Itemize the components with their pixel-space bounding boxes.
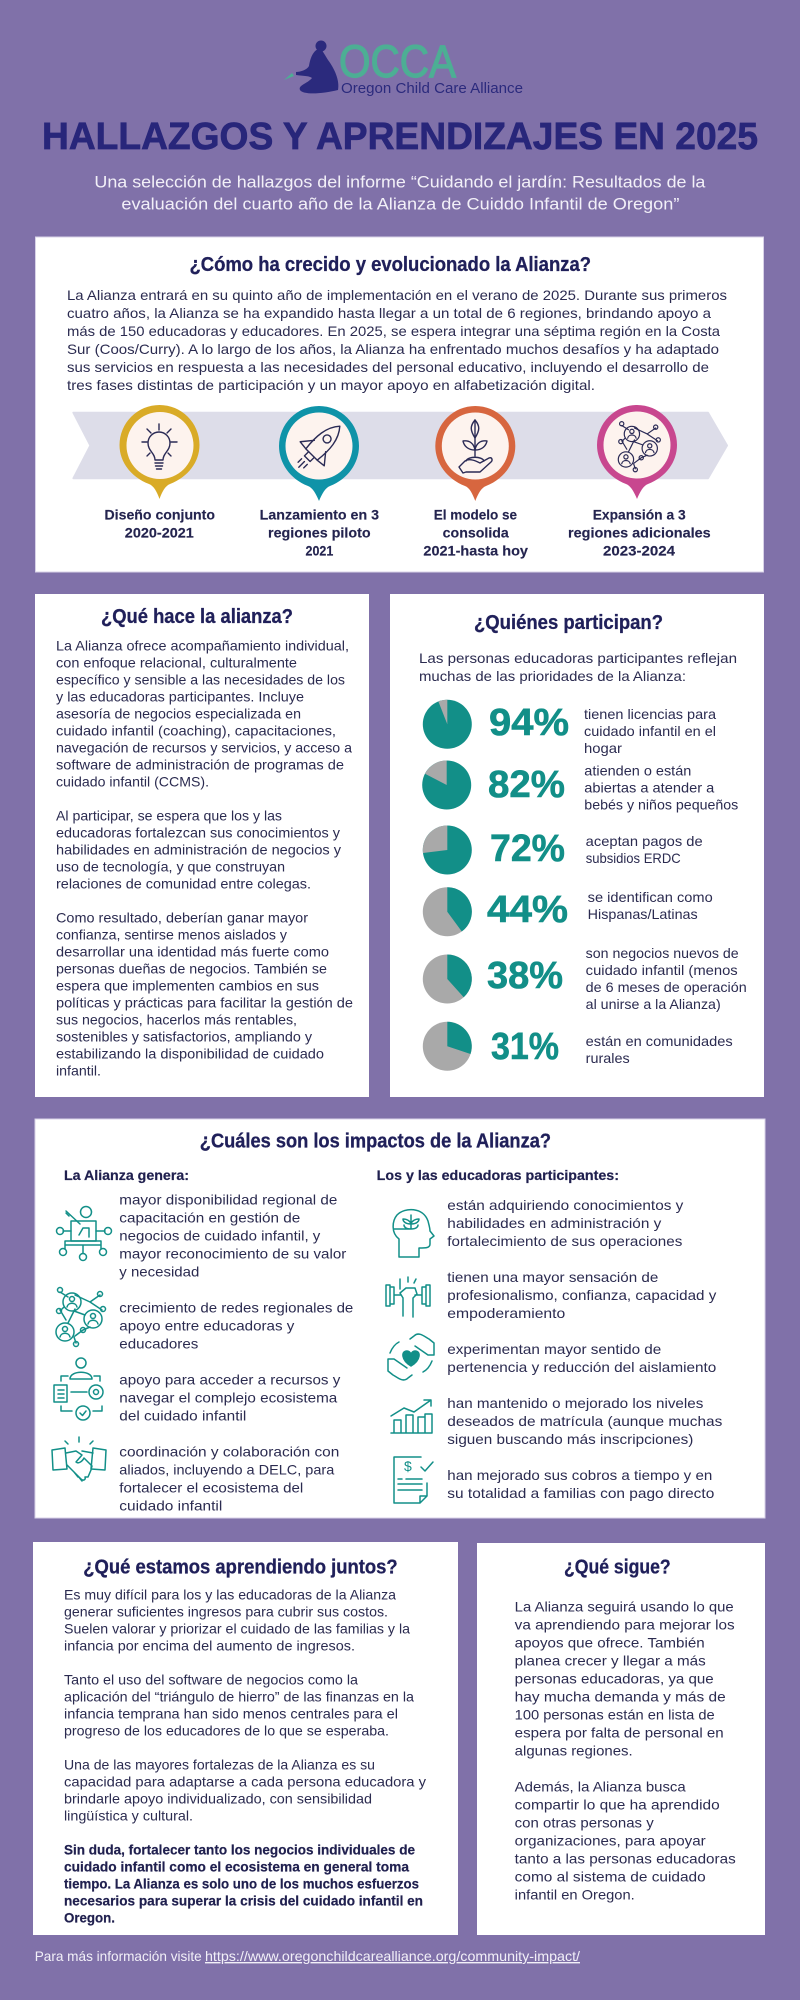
body text: what's next: planea crecer y llegar a más: [515, 1652, 706, 1668]
body text: what's next: apoyos que ofrece. También: [515, 1634, 705, 1650]
body text: learning: [64, 1586, 426, 1823]
heading: what's next: ¿Qué sigue?: [564, 1557, 671, 1579]
body text: growth: tres fases distintas de participación y un mayor apoyo en alfabetización digital.: [67, 377, 595, 393]
stat: 38% new businesses: cuidado infantil (menos: [586, 962, 738, 978]
subheading: the alliance generates: La Alianza genera:: [64, 1167, 189, 1183]
body text: what's next: [515, 1598, 736, 1902]
body text: what's next: como al sistema de cuidado: [515, 1868, 706, 1884]
icon: plant in hand: [459, 420, 492, 473]
text: acquiring knowledge: [447, 1197, 683, 1249]
text: enrollment: han mantenido o mejorado los niveles: [447, 1395, 703, 1411]
body text: what it does: cuidado infantil (CCMS).: [56, 774, 209, 790]
body text: what it does: sostenibles y satisfactorios, ampliando y: [56, 1029, 312, 1045]
stat: 94% licensed: hogar: [584, 740, 622, 756]
bold conclusion: learning: [64, 1841, 423, 1925]
body text: learning: lingüística y cultural.: [64, 1807, 193, 1823]
stat: 38% new businesses: 38%: [487, 955, 563, 997]
text: training availability: capacitación en gestión de: [119, 1209, 301, 1225]
icon: light bulb: [142, 424, 177, 469]
body text: what's next: espera por falta de personal en: [515, 1724, 724, 1740]
body text: what's next: hay mucha demanda y más de: [515, 1688, 726, 1704]
body text: what it does: Como resultado, deberían ganar mayor: [56, 910, 308, 926]
body text: what's next: algunas regiones.: [515, 1742, 633, 1758]
text: training availability: [119, 1191, 347, 1279]
body text: what it does: espera que implementen cambios en sus: [56, 978, 319, 994]
label: expansion: regiones adicionales: [568, 524, 711, 540]
text: professionalism: [447, 1269, 716, 1321]
label: pilot launch: regiones piloto: [268, 524, 371, 540]
body text: growth: más de 150 educadoras y educadores. En 2025, se espera integrar una séptima región en la Costa: [67, 323, 720, 339]
body text: what it does: La Alianza ofrece acompañamiento individual,: [56, 638, 349, 654]
body text: growth: [67, 287, 727, 393]
stat: 94% licensed: 94%: [489, 702, 569, 744]
pin: co-design: [120, 405, 200, 499]
stat: 82% infants: abiertas a atender a: [584, 780, 715, 796]
label: consolidated model: consolida: [443, 524, 509, 540]
icon: dumbbell and fist: [386, 1277, 430, 1317]
stat: 31% rural: rurales: [586, 1050, 630, 1066]
text: professionalism: tienen una mayor sensación de: [447, 1269, 659, 1285]
heading: who participates: ¿Quiénes participan?: [474, 612, 663, 634]
text: resource navigation: apoyo para acceder a recursos y: [119, 1371, 340, 1387]
body text: what it does: relaciones de comunidad entre colegas.: [56, 876, 311, 892]
stat: 38% new businesses: son negocios nuevos de: [586, 945, 739, 961]
subheading: participating educators: Los y las educadoras participantes:: [377, 1167, 619, 1183]
heading: impacts: ¿Cuáles son los impactos de la Alianza?: [200, 1131, 551, 1153]
panel: impacts: [35, 1119, 765, 1518]
stat: 82% infants: atienden o están: [584, 763, 691, 779]
subtitle: [94, 172, 706, 214]
stat: 94% licensed: [423, 700, 716, 756]
stat: 31% rural: [423, 1022, 733, 1071]
label: consolidated model: El modelo se: [434, 506, 517, 522]
text: enrollment: siguen buscando más inscripciones): [447, 1431, 693, 1447]
stat: 82% infants: [422, 760, 738, 813]
text: acquiring knowledge: fortalecimiento de sus operaciones: [447, 1233, 682, 1249]
body text: learning: capacidad para adaptarse a cada persona educadora y: [64, 1773, 426, 1789]
body text: growth: sus servicios en respuesta a las necesidades del personal educativo, incluyendo el desarrollo de: [67, 359, 709, 375]
stat: 31% rural: están en comunidades: [586, 1033, 733, 1049]
label: consolidated model: 2021-hasta hoy: [423, 542, 528, 558]
heading: growth: ¿Cómo ha crecido y evolucionado la Alianza?: [190, 254, 591, 276]
text: coordination: [119, 1443, 339, 1513]
label: consolidated model: [423, 506, 528, 558]
icon: invoice with check: [394, 1457, 433, 1503]
heading: what it does: ¿Qué hace la alianza?: [101, 606, 293, 628]
subtitle: Una selección de hallazgos del informe “Cuidando el jardín: Resultados de la: [94, 172, 706, 192]
stat: 72% subsidies: 72%: [490, 828, 565, 870]
body text: growth: La Alianza entrará en su quinto año de implementación en el verano de 2025. Durante sus primeros: [67, 287, 727, 303]
body text: learning: brindarle apoyo individualizado, con sensibilidad: [64, 1790, 372, 1806]
text: belonging: [447, 1341, 717, 1375]
text: regional networks: [119, 1299, 354, 1351]
body text: learning: Es muy difícil para los y las educadoras de la Alianza: [64, 1586, 396, 1602]
text: training availability: y necesidad: [119, 1263, 199, 1279]
stat: 82% infants: bebés y niños pequeños: [584, 797, 738, 813]
pin: consolidated model: [435, 406, 515, 501]
body text: what it does: software de administración de programas de: [56, 757, 344, 773]
pin: pilot launch: [279, 406, 359, 501]
body text: learning: aplicación del “triángulo de hierro” de las finanzas en la: [64, 1688, 414, 1704]
label: pilot launch: [260, 506, 379, 558]
label: expansion: Expansión a 3: [593, 506, 686, 522]
panel: what the alliance does: [35, 594, 369, 1097]
text: regional networks: apoyo entre educadoras y: [119, 1317, 294, 1333]
bold conclusion: learning: Oregon.: [64, 1909, 115, 1925]
stat: 44% Hispanic/Latina: [423, 887, 713, 936]
stat: 72% subsidies: aceptan pagos de: [586, 833, 703, 849]
stat: 38% new businesses: [423, 945, 747, 1012]
logo: Oregon Child Care Alliance: Oregon Child Care Alliance: [341, 80, 523, 97]
footer link: Para más información visite: [35, 1948, 202, 1964]
label: co-design: 2020-2021: [125, 524, 194, 540]
body text: what it does: educadoras fortalezcan sus conocimientos y: [56, 825, 340, 841]
body text: what it does: específico y sensible a las necesidades de los: [56, 672, 345, 688]
panel: what we are learning: [33, 1542, 458, 1935]
body text: what's next: compartir lo que ha aprendido: [515, 1796, 720, 1812]
body text: what's next: con otras personas y: [515, 1814, 654, 1830]
label: pilot launch: Lanzamiento en 3: [260, 506, 379, 522]
panel: who participates: [390, 594, 764, 1097]
stat: 38% new businesses: de 6 meses de operación: [586, 979, 747, 995]
body text: learning: infancia por encima del aumento de ingresos.: [64, 1637, 355, 1653]
text: resource navigation: [119, 1371, 340, 1423]
body text: what's next: La Alianza seguirá usando lo que: [515, 1598, 734, 1614]
body text: what it does: desarrollar una identidad más fuerte como: [56, 944, 329, 960]
text: professionalism: profesionalismo, confianza, capacidad y: [447, 1287, 716, 1303]
text: enrollment: deseados de matrícula (aunque muchas: [447, 1413, 722, 1429]
body text: learning: Suelen valorar y priorizar el cuidado de las familias y la: [64, 1620, 410, 1636]
stat: 82% infants: 82%: [488, 764, 565, 806]
stat: 44% Hispanic/Latina: Hispanas/Latinas: [588, 906, 698, 922]
text: acquiring knowledge: habilidades en administración y: [447, 1215, 661, 1231]
text: training availability: mayor disponibilidad regional de: [119, 1191, 338, 1207]
icon: rising bar chart: [391, 1400, 432, 1433]
text: professionalism: empoderamiento: [447, 1305, 566, 1321]
bold conclusion: learning: cuidado infantil como el ecosistema en general toma: [64, 1858, 409, 1874]
icon: training network: [56, 1206, 112, 1260]
text: coordination: cuidado infantil: [119, 1497, 222, 1513]
body text: what it does: estabilizando la disponibilidad de cuidado: [56, 1046, 324, 1062]
body text: learning: progreso de los educadores de lo que se esperaba.: [64, 1722, 389, 1738]
stat: 72% subsidies: [423, 826, 703, 874]
intro text: who participates: muchas de las prioridades de la Alianza:: [419, 668, 686, 684]
text: training availability: mayor reconocimiento de su valor: [119, 1245, 347, 1261]
body text: what's next: va aprendiendo para mejorar los: [515, 1616, 735, 1632]
intro text: who participates: Las personas educadoras participantes reflejan: [419, 650, 737, 666]
intro text: who participates: [419, 650, 737, 684]
icon: invoice with check: $: [404, 1458, 412, 1474]
subtitle: evaluación del cuarto año de la Alianza de Cuiddo Infantil de Oregon”: [121, 194, 680, 214]
body text: what it does: asesoría de negocios especializada en: [56, 706, 301, 722]
body text: what's next: infantil en Oregon.: [515, 1886, 635, 1902]
text: training availability: negocios de cuidado infantil, y: [119, 1227, 320, 1243]
body text: learning: infancia temprana han sido menos centrales para el: [64, 1705, 398, 1721]
body text: what's next: personas educadoras, ya que: [515, 1670, 714, 1686]
body text: what it does: políticas y prácticas para facilitar la gestión de: [56, 995, 353, 1011]
label: expansion: [568, 506, 711, 558]
pin: expansion: [597, 405, 677, 499]
body text: learning: Una de las mayores fortalezas de la Alianza es su: [64, 1756, 375, 1772]
icon: hands and heart: [388, 1334, 434, 1380]
body text: what it does: uso de tecnología, y que construyan: [56, 859, 285, 875]
body text: what it does: [56, 638, 353, 1079]
stat: 94% licensed: cuidado infantil en el: [584, 723, 716, 739]
body text: what it does: navegación de recursos y servicios, y acceso a: [56, 740, 352, 756]
stat: 94% licensed: tienen licencias para: [584, 706, 716, 722]
icon: head with sprout: [393, 1210, 434, 1257]
text: coordination: aliados, incluyendo a DELC, para: [119, 1461, 335, 1477]
body text: what it does: infantil.: [56, 1063, 101, 1079]
panel: what comes next: [477, 1543, 765, 1935]
body text: what it does: Al participar, se espera que los y las: [56, 808, 282, 824]
stat: 44% Hispanic/Latina: se identifican como: [588, 889, 713, 905]
body text: what's next: organizaciones, para apoyar: [515, 1832, 706, 1848]
text: collections: su totalidad a familias con pago directo: [447, 1485, 715, 1501]
footer link: [35, 1948, 580, 1964]
body text: what it does: con enfoque relacional, culturalmente: [56, 655, 297, 671]
text: coordination: fortalecer el ecosistema del: [119, 1479, 303, 1495]
label: expansion: 2023-2024: [603, 542, 675, 558]
icon: rocket: [287, 414, 352, 479]
body text: learning: Tanto el uso del software de negocios como la: [64, 1671, 358, 1687]
body text: growth: Sur (Coos/Curry). A lo largo de los años, la Alianza ha enfrentado muchos desafíos y ha adaptado: [67, 341, 719, 357]
label: pilot launch: 2021: [306, 542, 333, 558]
text: belonging: pertenencia y reducción del aislamiento: [447, 1359, 717, 1375]
stat: 44% Hispanic/Latina: 44%: [487, 889, 568, 931]
stat: 38% new businesses: al unirse a la Alianza): [586, 996, 721, 1012]
stat: 72% subsidies: subsidios ERDC: [586, 850, 681, 866]
icon: handshake: [52, 1437, 106, 1481]
panel: growth of the alliance: [36, 237, 764, 572]
icon: resource navigation: [54, 1358, 103, 1420]
icon: people network: [618, 422, 660, 472]
body text: learning: generar suficientes ingresos para cubrir sus costos.: [64, 1603, 388, 1619]
heading: learning: ¿Qué estamos aprendiendo juntos?: [83, 1557, 398, 1579]
body text: what it does: confianza, sentirse menos aislados y: [56, 927, 287, 943]
text: enrollment: [447, 1395, 722, 1447]
body text: what it does: sus negocios, hacerlos más rentables,: [56, 1012, 297, 1028]
bold conclusion: learning: necesarios para superar la crisis del cuidado infantil en: [64, 1892, 423, 1908]
text: belonging: experimentan mayor sentido de: [447, 1341, 662, 1357]
body text: what it does: personas dueñas de negocios. También se: [56, 961, 327, 977]
label: co-design: [104, 506, 215, 540]
timeline arrow band: [73, 413, 727, 478]
text: regional networks: educadores: [119, 1335, 198, 1351]
body text: growth: cuatro años, la Alianza se ha expandido hasta llegar a un total de 6 regiones, brindando apoyo a: [67, 305, 711, 321]
body text: what it does: habilidades en administración de negocios y: [56, 842, 341, 858]
body text: what's next: 100 personas están en lista de: [515, 1706, 715, 1722]
bold conclusion: learning: Sin duda, fortalecer tanto los negocios individuales de: [64, 1841, 415, 1857]
body text: what's next: tanto a las personas educadoras: [515, 1850, 736, 1866]
bold conclusion: learning: tiempo. La Alianza es solo uno de los muchos esfuerzos: [64, 1875, 419, 1891]
text: resource navigation: navegar el complejo ecosistema: [119, 1389, 338, 1405]
icon: regional networks: [56, 1288, 106, 1346]
stat: 31% rural: 31%: [491, 1026, 559, 1068]
text: collections: [447, 1467, 715, 1501]
body text: what's next: Además, la Alianza busca: [515, 1778, 686, 1794]
body text: what it does: cuidado infantil (coaching), capacitaciones,: [56, 723, 336, 739]
logo: Oregon Child Care Alliance: OCCA: [339, 36, 456, 87]
text: coordination: coordinación y colaboración con: [119, 1443, 339, 1459]
text: resource navigation: del cuidado infantil: [119, 1407, 246, 1423]
footer link: https://www.oregonchildcarealliance.org/community-impact/: [205, 1948, 580, 1964]
body text: what it does: y las educadoras participantes. Incluye: [56, 689, 304, 705]
text: regional networks: crecimiento de redes regionales de: [119, 1299, 354, 1315]
text: collections: han mejorado sus cobros a tiempo y en: [447, 1467, 712, 1483]
title: HALLAZGOS Y APRENDIZAJES EN 2025: [42, 116, 758, 158]
logo: Oregon Child Care Alliance: [284, 36, 523, 97]
text: acquiring knowledge: están adquiriendo conocimientos y: [447, 1197, 683, 1213]
label: co-design: Diseño conjunto: [104, 506, 215, 522]
